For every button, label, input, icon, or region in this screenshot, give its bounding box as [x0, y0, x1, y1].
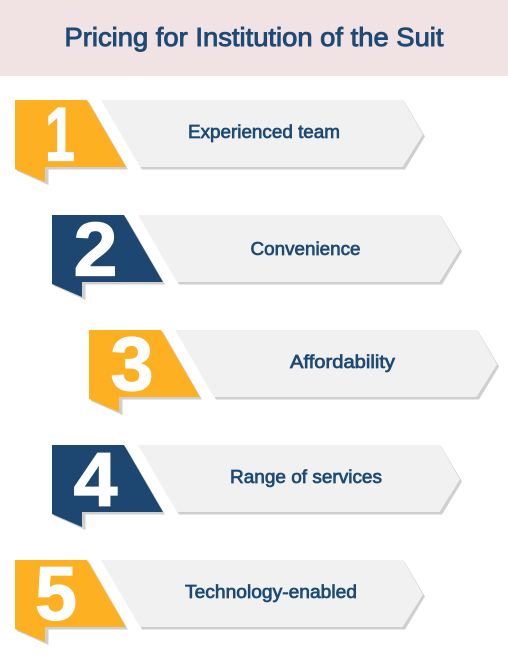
- item 2: Convenience: Convenience: [250, 239, 360, 259]
- item 4: Range of services: Range of services: [230, 467, 382, 487]
- item 1: Experienced team: Experienced team: [188, 122, 340, 142]
- title: Pricing for Institution of the Suit: [64, 22, 444, 52]
- item 1: Experienced team: [15, 92, 425, 185]
- title banner: [0, 0, 508, 76]
- item 4: Range of services: 4: [74, 438, 118, 522]
- item 2: Convenience: 2: [74, 208, 118, 292]
- item 5: Technology-enabled: [15, 552, 425, 645]
- item 5: Technology-enabled: Technology-enabled: [185, 582, 357, 602]
- item 1: Experienced team: 1: [45, 92, 75, 178]
- item 5: Technology-enabled: 5: [35, 552, 77, 637]
- item 2: Convenience: [52, 208, 462, 300]
- item 4: Range of services: [52, 438, 462, 530]
- item 3: Affordability: Affordability: [290, 352, 395, 372]
- item 3: Affordability: [89, 322, 499, 415]
- item 3: Affordability: 3: [110, 322, 154, 407]
